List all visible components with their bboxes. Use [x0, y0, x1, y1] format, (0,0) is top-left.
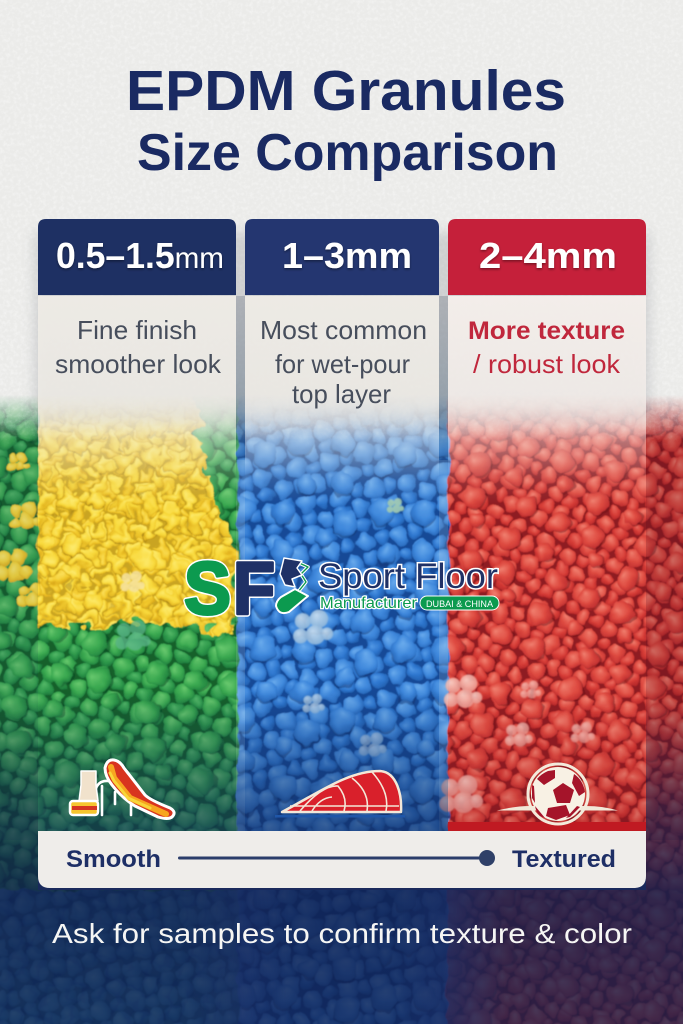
- column 2 header: [245, 219, 439, 295]
- background: coloured EPDM granules: [0, 396, 683, 1024]
- logo name: Sport Floor: [318, 557, 498, 596]
- column 3 lower shade: [448, 690, 646, 822]
- logo: SF Sport Floor Manufacturer: [184, 547, 499, 630]
- column gap shadows: [236, 296, 448, 476]
- white fade over the granules: [0, 290, 683, 440]
- column 1 description: Fine finish: [77, 315, 197, 345]
- column 3 description: / robust look: [473, 349, 621, 379]
- footer caption: Ask for samples to confirm texture & color: [52, 918, 632, 949]
- panel: 2-4mm column: [448, 219, 646, 832]
- column 2 size label: 1–3mm: [282, 235, 412, 276]
- icon: playground slide: [70, 760, 174, 818]
- logo pill: Dubai and China: [420, 596, 499, 610]
- column 1 body overlay: [38, 296, 236, 505]
- column 3 description: [468, 317, 625, 379]
- bottom navy overlay: [0, 870, 683, 1024]
- logo pill: Dubai and China: DUBAI & CHINA: [426, 599, 494, 610]
- label: textured: Textured: [512, 846, 616, 873]
- pale granule clusters: [116, 498, 595, 813]
- column 1 size label: 0.5–1.5mm: [56, 235, 224, 276]
- icon: running track: [275, 771, 405, 818]
- column 2 description: for wet-pour: [275, 349, 410, 379]
- title: [126, 59, 566, 182]
- column 3 bottom band: [448, 822, 646, 832]
- column 2 body overlay: [245, 296, 439, 505]
- logo icon: runner: [276, 558, 308, 613]
- column 1 lower shade: [38, 690, 236, 832]
- label: smooth: Smooth: [66, 846, 161, 873]
- side strips softened: [0, 340, 683, 890]
- background: speckled white texture: [0, 0, 683, 450]
- panel: smooth to textured scale bar: [38, 831, 646, 888]
- title: EPDM Granules: [126, 59, 566, 123]
- column 1 description: smoother look: [55, 349, 222, 379]
- soft card shadow: [34, 232, 650, 422]
- column 2 description: [260, 315, 427, 409]
- column 1 header: [38, 219, 236, 295]
- column 3 description: More texture: [468, 317, 625, 345]
- column 3 header: [448, 219, 646, 295]
- title: Size Comparison: [137, 124, 558, 182]
- logo letter S: S: [184, 547, 231, 630]
- column 1 description: [55, 315, 222, 379]
- panel: 1-3mm column: [245, 219, 439, 832]
- logo tagline: Manufacturer: [320, 595, 418, 612]
- panel: 0.5-1.5mm column: [38, 219, 236, 832]
- bar background: [38, 831, 646, 888]
- icon: football: [497, 764, 618, 824]
- column 3 body overlay: [448, 296, 646, 505]
- column 2 description: Most common: [260, 315, 427, 345]
- column 2 description: top layer: [292, 379, 391, 409]
- scale line with end dot: [178, 850, 495, 866]
- logo letter F: F: [233, 547, 275, 630]
- column 3 size label: 2–4mm: [479, 235, 617, 276]
- column 2 lower shade: [245, 690, 439, 832]
- logo letter S: S: [184, 547, 231, 630]
- logo letter F: F: [233, 547, 275, 630]
